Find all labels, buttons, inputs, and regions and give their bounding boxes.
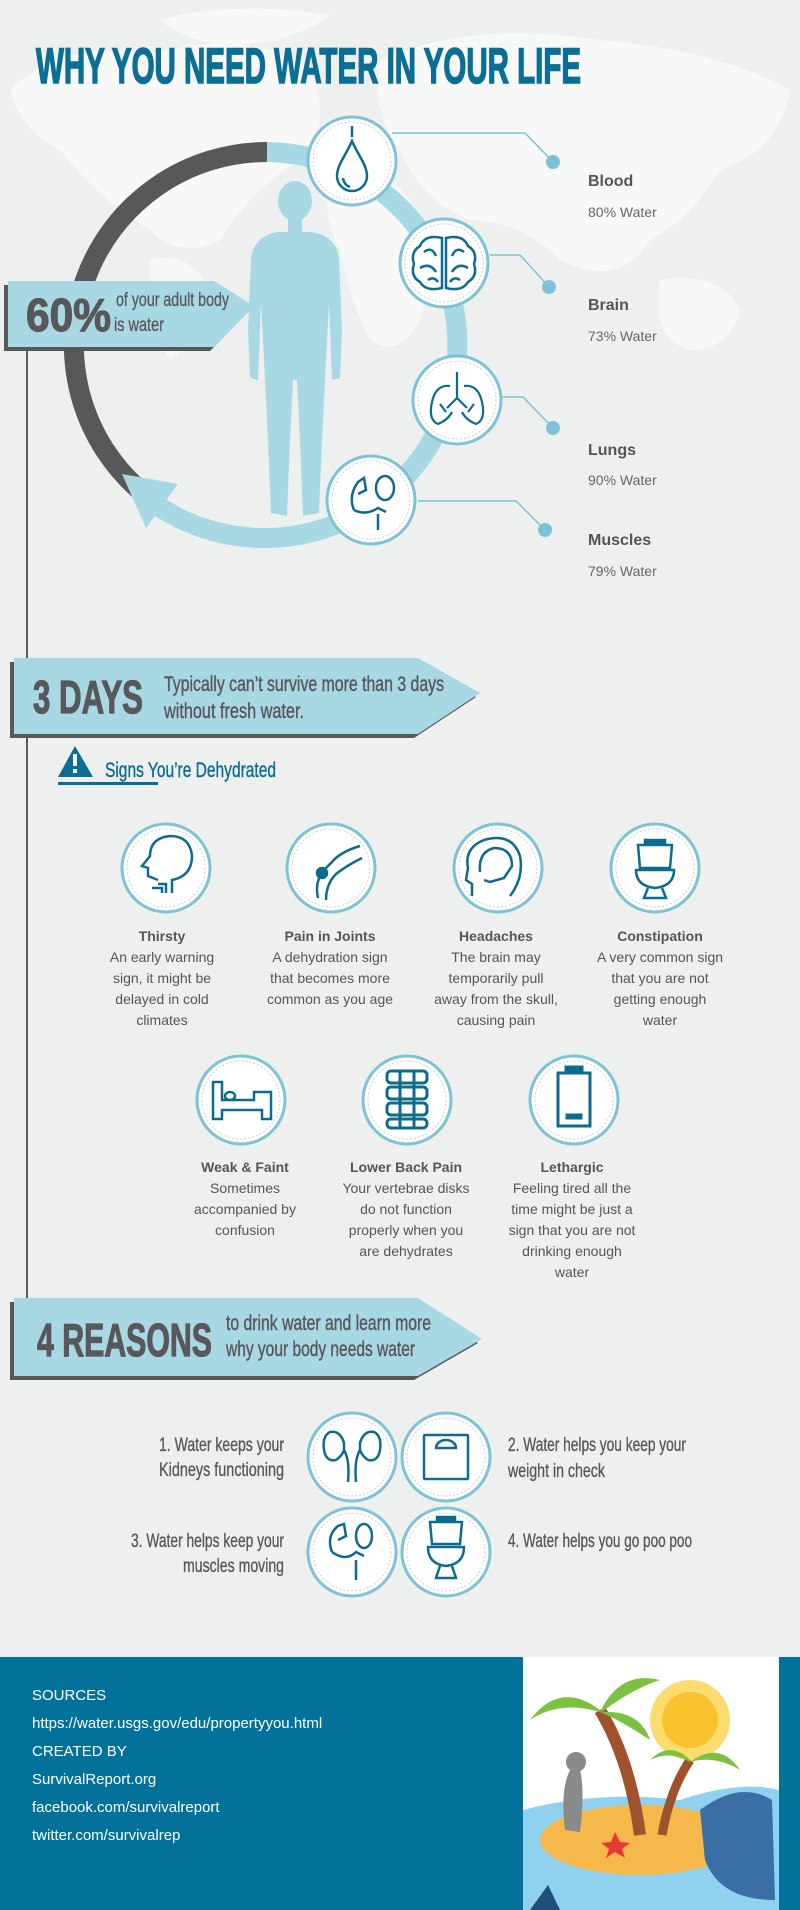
body silhouette: [248, 181, 342, 516]
sign: headaches: causing pain: [457, 1012, 535, 1028]
sign: lower back pain: do not function: [360, 1201, 452, 1217]
footer: SOURCES: [32, 1687, 106, 1704]
sign: weak & faint: Weak & Faint: [201, 1159, 289, 1175]
footer illustration: island: [523, 1657, 779, 1910]
sign: weak & faint: Sometimes: [210, 1180, 280, 1196]
sign: headaches: [434, 824, 558, 1028]
sign: lower back pain: properly when you: [349, 1222, 463, 1238]
sign: pain in joints: common as you age: [267, 991, 393, 1007]
banner: 60%: [4, 281, 254, 351]
banner: 3 days: [10, 658, 480, 738]
sign: lethargic: sign that you are not: [509, 1222, 636, 1238]
banner: 60%: of your adult body: [116, 290, 229, 311]
sign: constipation: getting enough: [614, 991, 706, 1007]
reasons text: 3. Water helps keep your: [131, 1531, 284, 1552]
labels: organs: 80% Water: [588, 204, 657, 220]
sign: lower back pain: are dehydrates: [359, 1243, 453, 1259]
banner: 3 days: without fresh water.: [163, 700, 304, 723]
sign: thirsty: An early warning: [110, 949, 214, 965]
icon: brain: [400, 219, 488, 307]
banner: 60%: is water: [114, 315, 165, 336]
sign: thirsty: sign, it might be: [113, 970, 211, 986]
connectors: [392, 133, 553, 530]
icon: lungs: [413, 356, 501, 444]
sign: thirsty: [110, 824, 214, 1028]
banner: 4 reasons: to drink water and learn more: [226, 1312, 431, 1335]
footer: https://water.usgs.gov/edu/propertyyou.html: [32, 1715, 322, 1732]
reasons text: 4. Water helps you go poo poo: [508, 1531, 692, 1552]
reasons text: Kidneys functioning: [159, 1460, 284, 1481]
labels: organs: Brain: [588, 297, 629, 314]
icon: blood drop: [308, 117, 396, 205]
sign: headaches: away from the skull,: [434, 991, 558, 1007]
sign: headaches: The brain may: [451, 949, 541, 965]
sign: pain in joints: [267, 824, 393, 1007]
connector dots: [538, 155, 560, 537]
footer: facebook.com/survivalreport: [32, 1799, 220, 1816]
sign: pain in joints: that becomes more: [270, 970, 390, 986]
reasons text: weight in check: [507, 1461, 605, 1482]
sign: lethargic: Lethargic: [540, 1159, 604, 1175]
reason icon: kidneys: [308, 1413, 396, 1501]
banner: 4 reasons: why your body needs water: [225, 1338, 415, 1361]
sign: headaches: Headaches: [459, 928, 533, 944]
labels: organs: 90% Water: [588, 472, 657, 488]
sign: lethargic: water: [554, 1264, 589, 1280]
sign: weak & faint: [194, 1056, 296, 1238]
sign: constipation: Constipation: [617, 928, 703, 944]
heading: signs you're dehydrated: [58, 746, 276, 785]
sign: lethargic: time might be just a: [511, 1201, 633, 1217]
labels: organs: Muscles: [588, 532, 651, 549]
reasons text: [131, 1435, 692, 1577]
sign: constipation: A very common sign: [597, 949, 723, 965]
reasons text: 2. Water helps you keep your: [508, 1435, 686, 1456]
banner: 60%: 60%: [26, 289, 111, 341]
sign: weak & faint: confusion: [215, 1222, 275, 1238]
icon: muscle arm: [327, 456, 415, 544]
banner: 4 reasons: 4 REASONS: [37, 1314, 212, 1366]
sign: weak & faint: accompanied by: [194, 1201, 296, 1217]
banner: 4 reasons: [10, 1298, 482, 1380]
footer: SurvivalReport.org: [32, 1771, 156, 1788]
sign: lethargic: drinking enough: [522, 1243, 622, 1259]
reason icon: toilet: [402, 1508, 490, 1596]
sign: lower back pain: [342, 1056, 470, 1259]
footer: twitter.com/survivalrep: [32, 1827, 180, 1844]
reasons text: 1. Water keeps your: [159, 1435, 284, 1456]
banner: 3 days: Typically can’t survive more than 3 days: [164, 673, 444, 696]
labels: organs: Lungs: [588, 442, 636, 459]
sign: constipation: [597, 824, 723, 1028]
labels: organs: 73% Water: [588, 328, 657, 344]
sign: thirsty: Thirsty: [139, 928, 186, 944]
reason icon: muscle: [308, 1508, 396, 1596]
ring: dark arc: [74, 152, 267, 493]
sign: lethargic: Feeling tired all the: [513, 1180, 631, 1196]
labels: organs: Blood: [588, 173, 633, 190]
sign: constipation: water: [642, 1012, 677, 1028]
ring: light arc with arrow: [122, 152, 457, 538]
sign: lethargic: [509, 1056, 636, 1280]
sign: thirsty: delayed in cold: [115, 991, 209, 1007]
sign: lower back pain: Your vertebrae disks: [342, 1180, 470, 1196]
banner: 3 days: 3 DAYS: [33, 671, 143, 723]
sign: lower back pain: Lower Back Pain: [350, 1159, 462, 1175]
sign: pain in joints: A dehydration sign: [272, 949, 388, 965]
labels: organs: 79% Water: [588, 563, 657, 579]
sign: pain in joints: Pain in Joints: [284, 928, 376, 944]
labels: organs: [588, 173, 657, 579]
sign: constipation: that you are not: [611, 970, 709, 986]
footer: CREATED BY: [32, 1743, 127, 1760]
sign: thirsty: climates: [136, 1012, 188, 1028]
heading: signs you're dehydrated: Signs You’re Dehydrated: [105, 759, 276, 782]
footer: [0, 1657, 800, 1910]
reason icon: scale: [402, 1413, 490, 1501]
timeline line: [26, 349, 28, 1304]
sign: headaches: temporarily pull: [449, 970, 543, 986]
reasons text: muscles moving: [183, 1556, 284, 1577]
